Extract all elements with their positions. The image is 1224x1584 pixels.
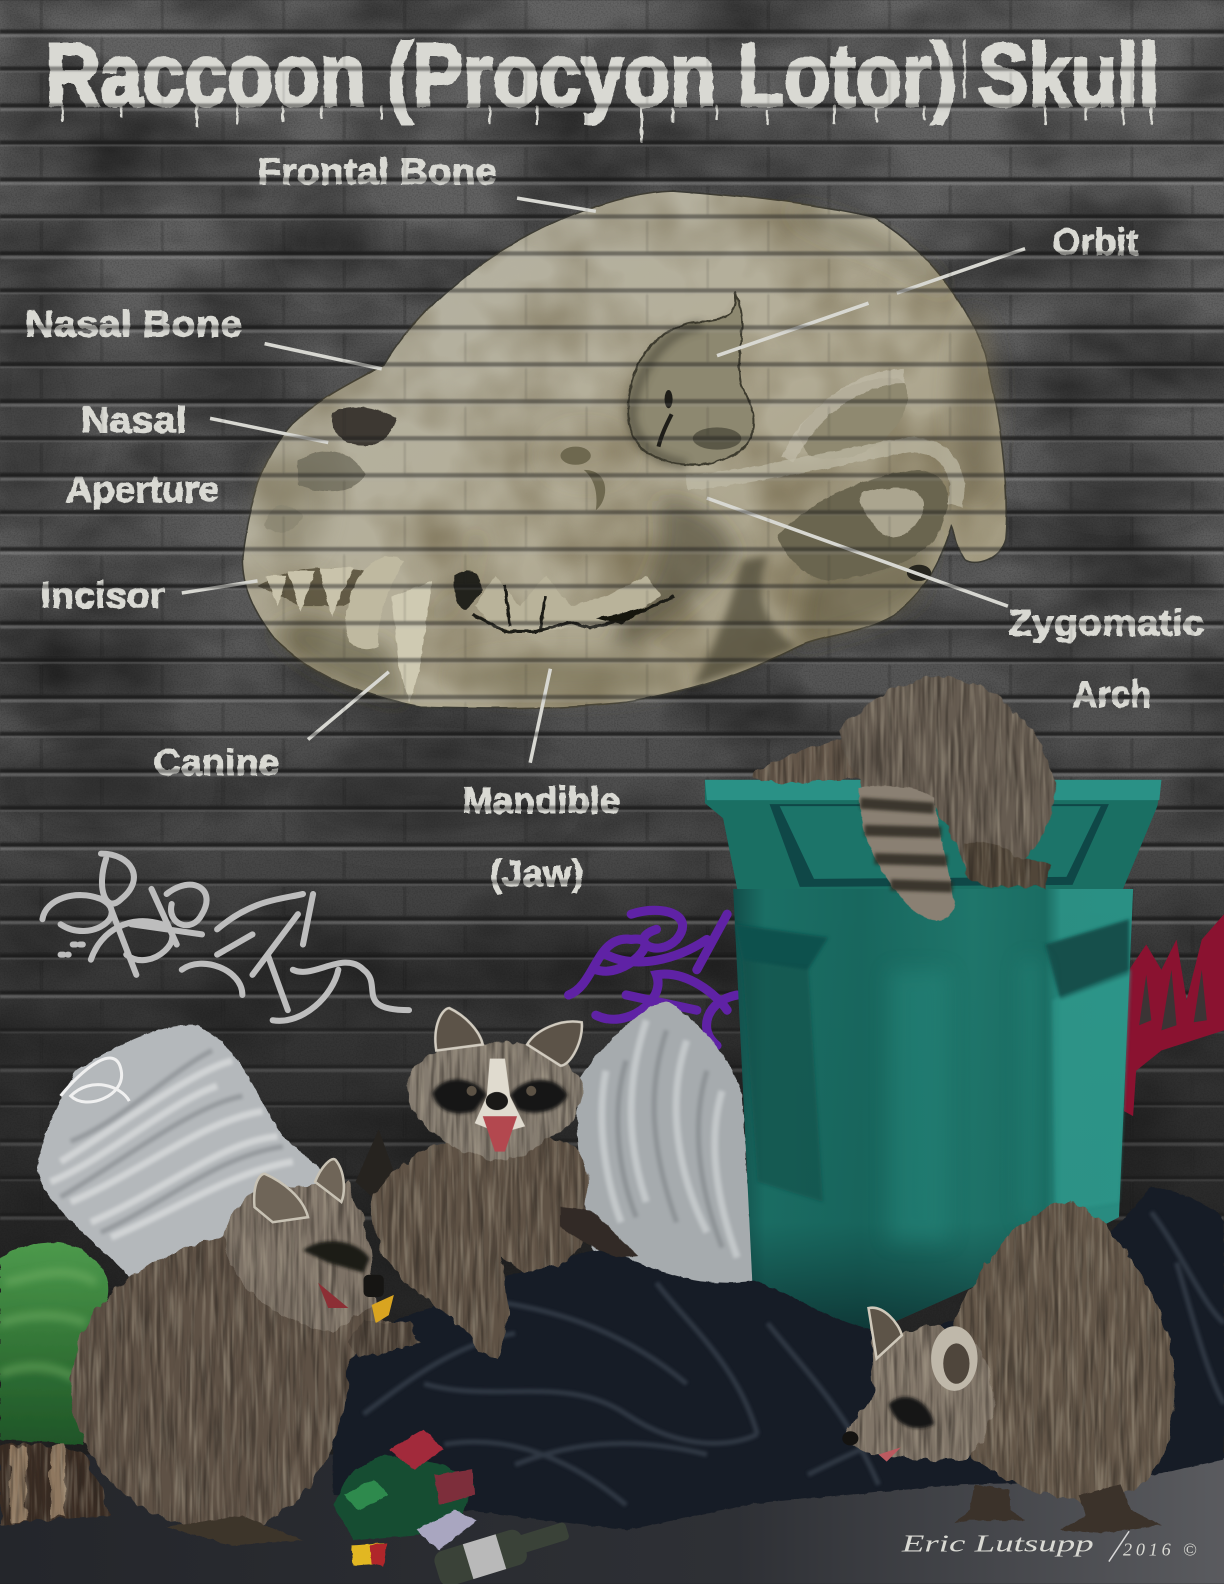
- label: Frontal Bone: Frontal Bone: [258, 150, 497, 192]
- label: Nasal Bone: Nasal Bone: [25, 303, 242, 345]
- signature: Eric Lutsupp: [900, 1530, 1094, 1557]
- front arm: [752, 737, 879, 783]
- paw on bag: [560, 1207, 638, 1258]
- head: [406, 1042, 584, 1162]
- trash bag: black: [331, 1187, 1224, 1530]
- skull illustration: [242, 190, 1006, 708]
- label: Nasal Aperture: Aperture: [66, 468, 219, 510]
- signature: 2016 ©: [1123, 1539, 1197, 1559]
- skull shading: [258, 207, 997, 702]
- raccoon: climbing trash can: [752, 678, 1055, 920]
- label: Mandible (Jaw): Mandible: [463, 779, 620, 821]
- snout: [842, 1431, 901, 1462]
- trash bag: white right: [577, 1002, 755, 1303]
- leader lines: [182, 198, 1025, 763]
- temporal arch and fossa: [687, 376, 957, 581]
- broken glass and litter: [333, 1429, 573, 1584]
- can streak highlights: [889, 960, 1040, 1242]
- trash bag: white left: [37, 1025, 323, 1288]
- raccoon: rear left eating: [0, 1159, 419, 1545]
- can lid rim: [705, 780, 1161, 889]
- face mask: [432, 1059, 568, 1152]
- label: Orbit: Orbit: [1052, 221, 1138, 263]
- wine bottle: [432, 1514, 573, 1584]
- graffiti tag: white: [42, 854, 409, 1021]
- small foramen: [560, 447, 605, 510]
- nose and snack: [364, 1275, 394, 1323]
- far ear shadow: [355, 1129, 394, 1212]
- head: [843, 1323, 993, 1461]
- label: Mandible (Jaw): (Jaw): [490, 852, 584, 894]
- orbit: [628, 291, 754, 465]
- label: Zygomatic Arch: Zygomatic: [1008, 601, 1205, 643]
- can handle recess: [735, 919, 1131, 1212]
- label: Canine: Canine: [154, 741, 280, 783]
- paw: [348, 1321, 419, 1359]
- ears: [435, 1008, 582, 1066]
- signature: [900, 1530, 1197, 1562]
- graffiti tag: purple: [569, 910, 737, 1045]
- tail: [0, 1444, 111, 1525]
- ears: [869, 1308, 978, 1391]
- label: Mandible (Jaw): [463, 779, 620, 894]
- raccoon: right foraging: [842, 1202, 1174, 1533]
- ears: [254, 1159, 344, 1222]
- raccoon: center standing: [355, 1008, 638, 1359]
- label: Zygomatic Arch: Arch: [1073, 673, 1151, 715]
- title paint drips: [63, 41, 1151, 142]
- legs and feet: [954, 1485, 1161, 1533]
- skull labels: [25, 150, 1205, 894]
- nasal aperture: [265, 407, 397, 533]
- hind foot: [167, 1515, 303, 1545]
- label: Incisor: Incisor: [40, 574, 165, 616]
- trash can: [705, 780, 1161, 1333]
- teeth and jaw: [258, 556, 675, 702]
- ground: [0, 1454, 1224, 1584]
- label: Zygomatic Arch: [1008, 601, 1205, 715]
- trash bag: green: [0, 1242, 108, 1444]
- lower jaw: [692, 556, 798, 687]
- label: Nasal Aperture: [66, 398, 219, 510]
- ear canal: [907, 565, 931, 581]
- eye mask: [303, 1241, 370, 1273]
- head: [224, 1182, 376, 1333]
- hind leg: [964, 842, 1050, 887]
- striped tail: [858, 786, 954, 920]
- eye mask: [889, 1397, 934, 1428]
- bag knot: [61, 1058, 129, 1102]
- graffiti tag: red: [1124, 914, 1224, 1116]
- mouth: [318, 1283, 348, 1308]
- brick courses overlay: [0, 0, 1224, 1010]
- label: Nasal Aperture: Nasal: [81, 398, 187, 440]
